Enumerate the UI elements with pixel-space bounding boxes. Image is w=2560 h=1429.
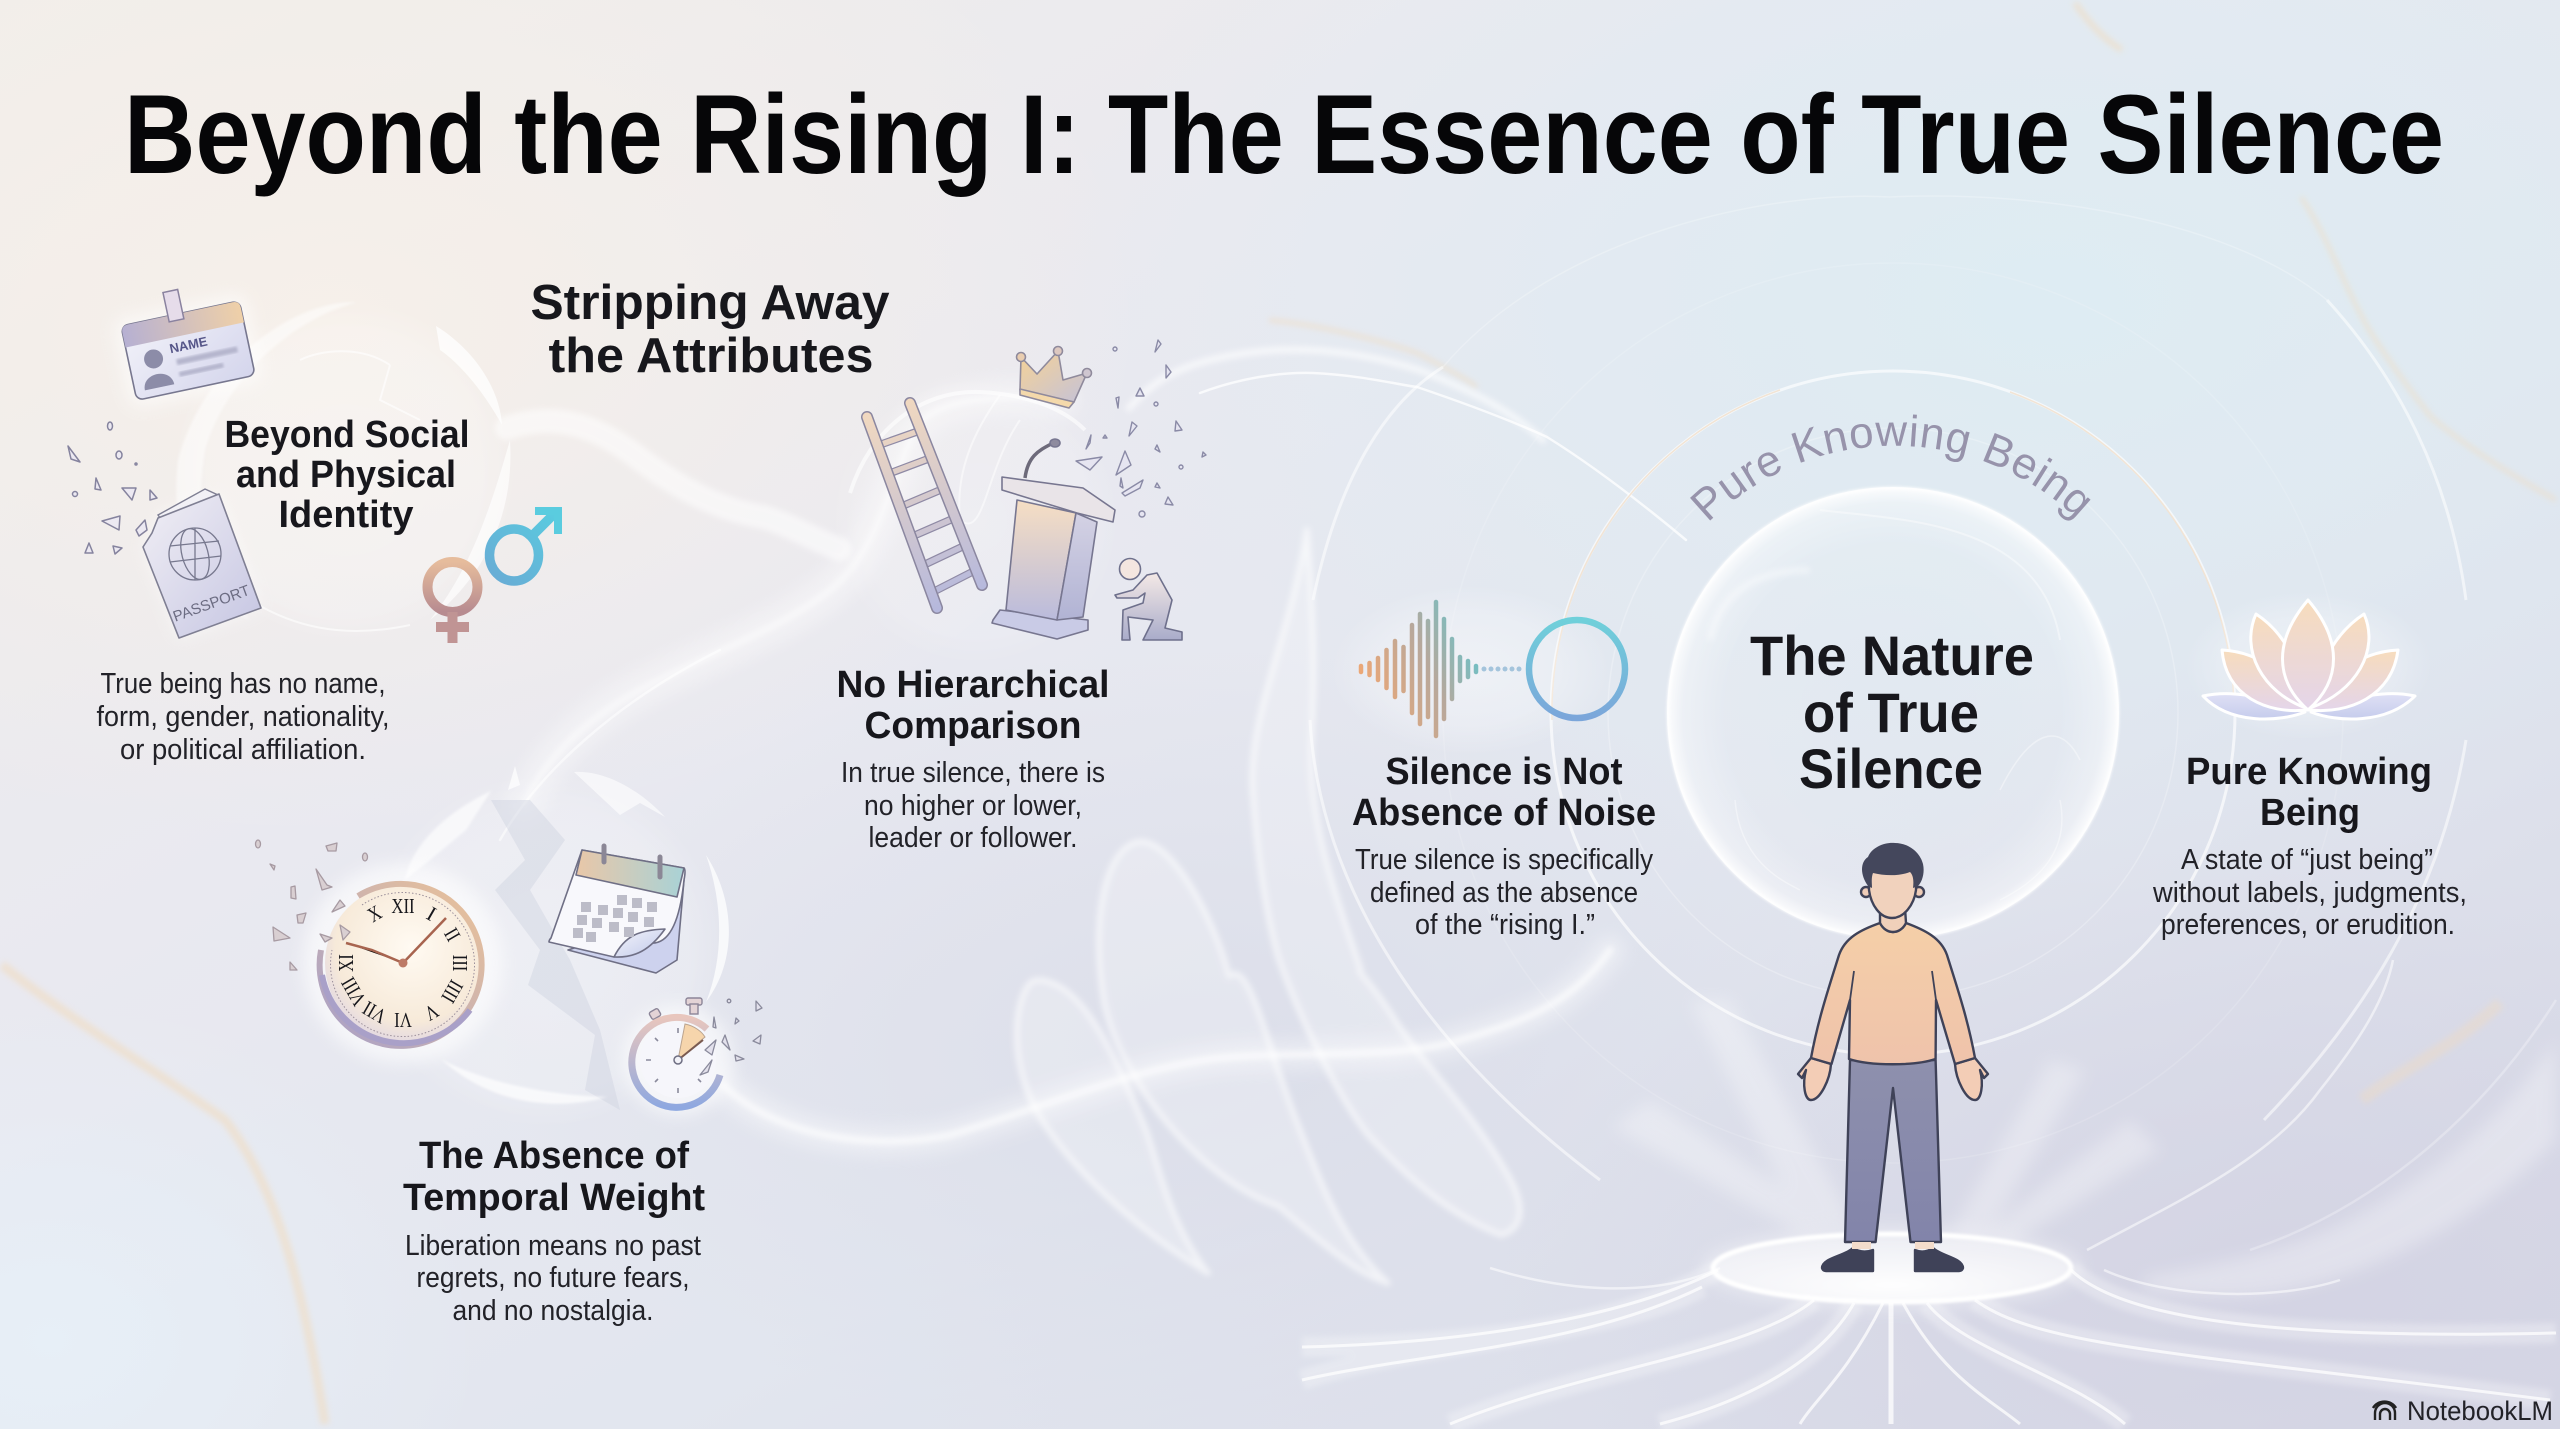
heading (2186, 751, 2432, 834)
fractured sphere behind time (367, 766, 729, 1128)
heading: Silence (1799, 737, 1983, 800)
shirt (1811, 923, 1975, 1064)
light rays and roots below the figure (1302, 960, 2556, 1424)
body text: In true silence, there is (841, 757, 1105, 789)
icon: shattering clock: II (439, 924, 464, 946)
body text: preferences, or erudition. (2161, 909, 2455, 941)
shoes (1822, 1248, 1873, 1271)
icon: ID badge: NAME (168, 334, 209, 356)
fractured sphere behind identity (173, 298, 517, 642)
icon: shattering clock: V (420, 998, 442, 1025)
body text: and no nostalgia. (452, 1295, 654, 1327)
section heading: stripping away the attributes: the Attributes (548, 329, 874, 383)
icon: podium shards (1076, 340, 1206, 517)
panel: no hierarchical comparison (836, 340, 1206, 854)
heading: Identity (278, 494, 414, 536)
panel: silence is not absence of noise (1330, 585, 1656, 941)
icon: waveform fading into ring (1330, 585, 1625, 755)
NotebookLM watermark: NotebookLM (2407, 1396, 2553, 1426)
heading: of True (1803, 681, 1979, 744)
heading: The Absence of (419, 1135, 689, 1177)
heading (836, 664, 1110, 747)
neck and head (1880, 908, 1906, 932)
heading: Beyond Social (224, 414, 470, 456)
icon: podium (992, 439, 1115, 639)
icon: shattering clock: XI (335, 954, 359, 972)
body text (841, 757, 1105, 854)
heading (224, 414, 470, 536)
body text: leader or follower. (868, 822, 1078, 854)
heading (1352, 751, 1656, 834)
heading: Absence of Noise (1352, 792, 1656, 834)
icon: clock shards (256, 840, 368, 970)
icon: stopwatch (623, 998, 733, 1115)
body text: A state of “just being” (2181, 844, 2433, 876)
heading: Pure Knowing (2186, 751, 2432, 793)
icon: kneeling figure (1115, 558, 1182, 640)
section heading: stripping away the attributes: Stripping Away (530, 276, 890, 330)
icon: crown (1016, 346, 1092, 408)
panel: the absence of temporal weight (256, 840, 762, 1327)
body text: or political affiliation. (120, 734, 366, 766)
icon: ladder (867, 403, 982, 608)
central bubble: the nature of true silence (1667, 487, 2119, 939)
concentric rings around the bubble (1310, 196, 2466, 1180)
icon: passport (143, 489, 261, 638)
body text: of the “rising I.” (1415, 909, 1595, 941)
body text: regrets, no future fears, (416, 1262, 690, 1294)
panel: beyond social and physical identity (68, 276, 562, 766)
icon: shattering clock: X (364, 901, 386, 928)
hair (1862, 843, 1924, 888)
icon: shattering clock: VIII (337, 973, 372, 1009)
section heading: stripping away the attributes (530, 276, 890, 383)
icon: passport: PASSPORT (171, 582, 252, 625)
body text: True being has no name, (100, 668, 386, 700)
curved label: pure knowing being: Pure Knowing Being (1690, 414, 2090, 521)
glowing disc (1702, 1226, 2082, 1310)
body text: without labels, judgments, (2152, 877, 2467, 909)
icon: shattering clock: VII (359, 996, 391, 1027)
heading: Comparison (864, 705, 1082, 747)
icon: passport shards (68, 422, 157, 554)
trousers (1845, 1060, 1941, 1242)
body text: defined as the absence (1370, 877, 1638, 909)
icon: ID badge (108, 276, 265, 410)
body text (2152, 844, 2467, 941)
body text: no higher or lower, (864, 790, 1082, 822)
heading: Being (2260, 792, 2360, 834)
panel: pure knowing being (2152, 590, 2467, 941)
icon: male symbol (490, 507, 562, 581)
body text: Liberation means no past (405, 1230, 701, 1262)
central standing figure (1798, 843, 1988, 1271)
body text: True silence is specifically (1355, 844, 1654, 876)
icon: lotus (2183, 590, 2433, 740)
icon: shattering clock (303, 863, 503, 1063)
heading: The Nature (1750, 624, 2034, 687)
icon: female symbol (428, 562, 478, 643)
heading: Temporal Weight (403, 1177, 705, 1219)
heading: No Hierarchical (836, 664, 1110, 706)
body text (1355, 844, 1654, 941)
flowing white ribbons (500, 350, 1686, 1141)
icon: calendar (549, 846, 685, 973)
fractured sphere behind hierarchy (830, 375, 1120, 665)
icon: shattering clock: IIII (436, 976, 467, 1007)
translucent fins (1017, 530, 1520, 1283)
body text (96, 668, 390, 766)
hands (1798, 1058, 1988, 1100)
icon: shattering clock: XII (391, 895, 415, 919)
icon: shattering clock: I (422, 901, 441, 926)
heading: and Physical (236, 454, 456, 496)
heading: Silence is Not (1386, 751, 1623, 793)
icon: stopwatch shards (700, 999, 762, 1075)
body text: form, gender, nationality, (96, 701, 390, 733)
icon: shattering clock: III (447, 955, 471, 971)
icon: shattering clock: VI (394, 1007, 412, 1031)
heading (403, 1135, 705, 1219)
heading (1750, 624, 2034, 800)
body text (405, 1230, 701, 1327)
